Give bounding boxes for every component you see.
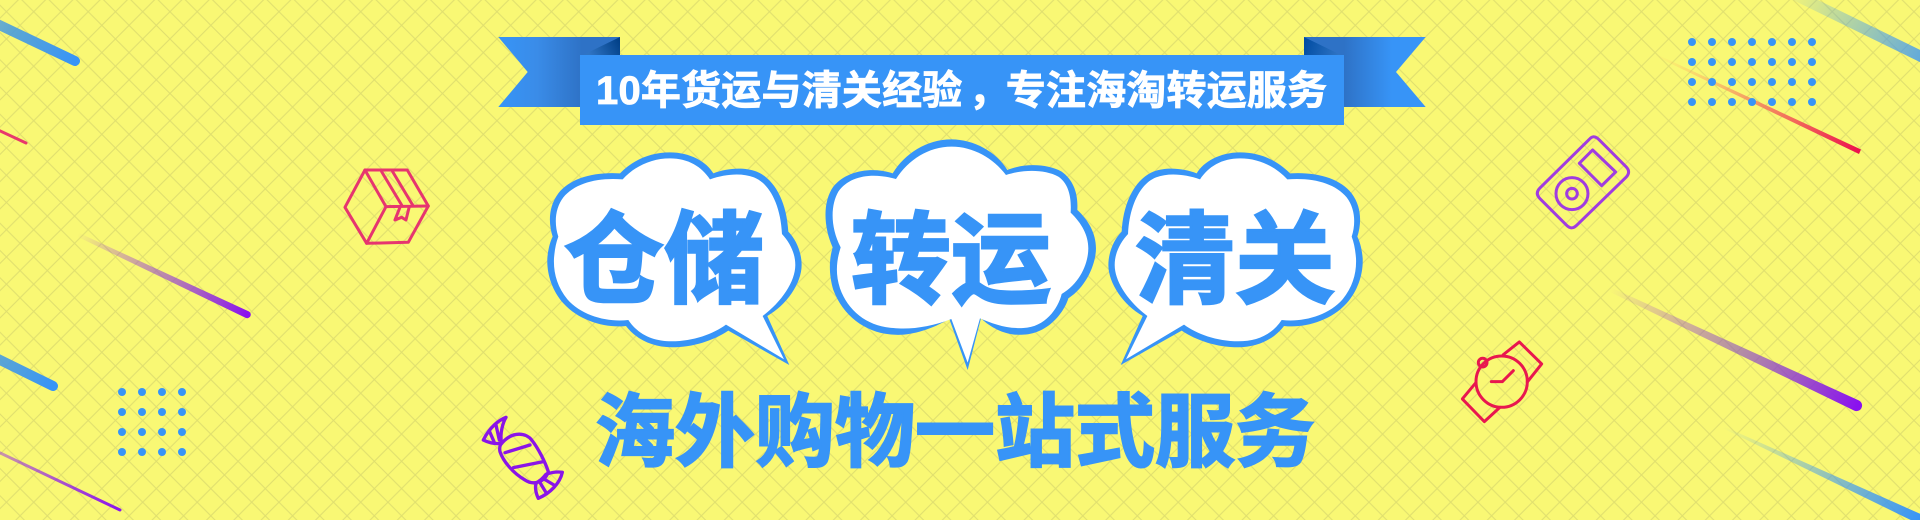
heading: experience slogan: 10年货运与清关经验，专注海淘转运服务 <box>596 69 1327 113</box>
streak: red left <box>0 103 26 143</box>
streak: purple thick right <box>1608 287 1862 411</box>
speech bubble: forwarding: 转运 <box>851 205 1051 317</box>
streak: blue lower left <box>0 306 53 386</box>
streak: purple bottom left <box>0 410 120 510</box>
speech bubble: customs clearance <box>1108 152 1363 365</box>
ribbon: main band <box>580 55 1344 125</box>
dots: left grid <box>118 388 186 456</box>
icon: candy <box>483 417 562 498</box>
icon: wristwatch <box>1462 342 1542 422</box>
streak: purple left <box>76 232 251 318</box>
heading: one-stop overseas shopping service: 海外购物一站式服务 <box>595 388 1315 477</box>
dots: right grid <box>1688 38 1816 106</box>
ribbon: right tail <box>1304 37 1426 107</box>
speech bubble: forwarding <box>825 139 1096 370</box>
icon: music player <box>1537 137 1629 228</box>
streak: blue bottom right <box>1722 426 1920 520</box>
streak: blue top left <box>0 0 75 61</box>
icon: cardboard box <box>345 170 428 243</box>
streak: red right <box>1655 54 1861 154</box>
speech bubble: warehousing <box>547 152 802 365</box>
ribbon: left tail <box>498 37 620 107</box>
speech bubble: customs clearance: 清关 <box>1135 205 1335 317</box>
speech bubble: warehousing: 仓储 <box>564 205 764 317</box>
streak: blue top right <box>1785 0 1920 100</box>
